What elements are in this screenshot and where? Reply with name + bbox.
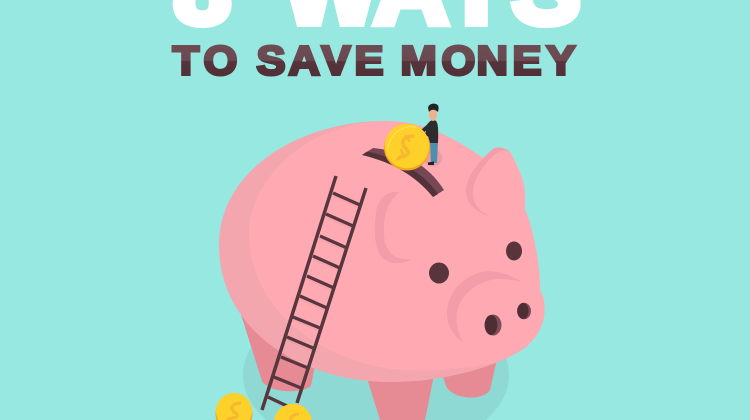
man shoe xyxy=(428,162,434,165)
pig body xyxy=(219,121,545,382)
pig leg: back right xyxy=(441,355,498,398)
nostril right xyxy=(517,303,531,319)
large coin xyxy=(384,124,430,170)
man shadow xyxy=(424,150,442,166)
man torso xyxy=(423,120,438,143)
ladder rung shadows xyxy=(287,196,360,351)
subtitle: to save money: TOSAVEMONEY xyxy=(173,38,575,83)
piggy bank xyxy=(219,121,545,420)
coin: bottom right xyxy=(274,404,312,420)
nostril left xyxy=(484,314,502,336)
ground shadow xyxy=(243,295,509,420)
coin slot xyxy=(362,148,444,197)
ladder xyxy=(262,176,366,410)
pig body highlight xyxy=(249,121,545,370)
man figure xyxy=(421,104,442,166)
ladder rails xyxy=(262,176,366,410)
man arm xyxy=(421,122,431,133)
coin: bottom left xyxy=(216,393,252,420)
ladder rungs xyxy=(268,193,360,406)
pig leg: back left xyxy=(238,305,316,391)
right eye xyxy=(506,242,522,260)
snout crease xyxy=(447,271,522,342)
pig leg: front xyxy=(366,375,434,420)
cheek crease xyxy=(375,192,412,263)
man hair xyxy=(428,104,439,112)
man legs xyxy=(430,142,438,163)
left eye xyxy=(429,262,449,284)
ear crease xyxy=(466,148,510,217)
man face xyxy=(429,110,437,121)
